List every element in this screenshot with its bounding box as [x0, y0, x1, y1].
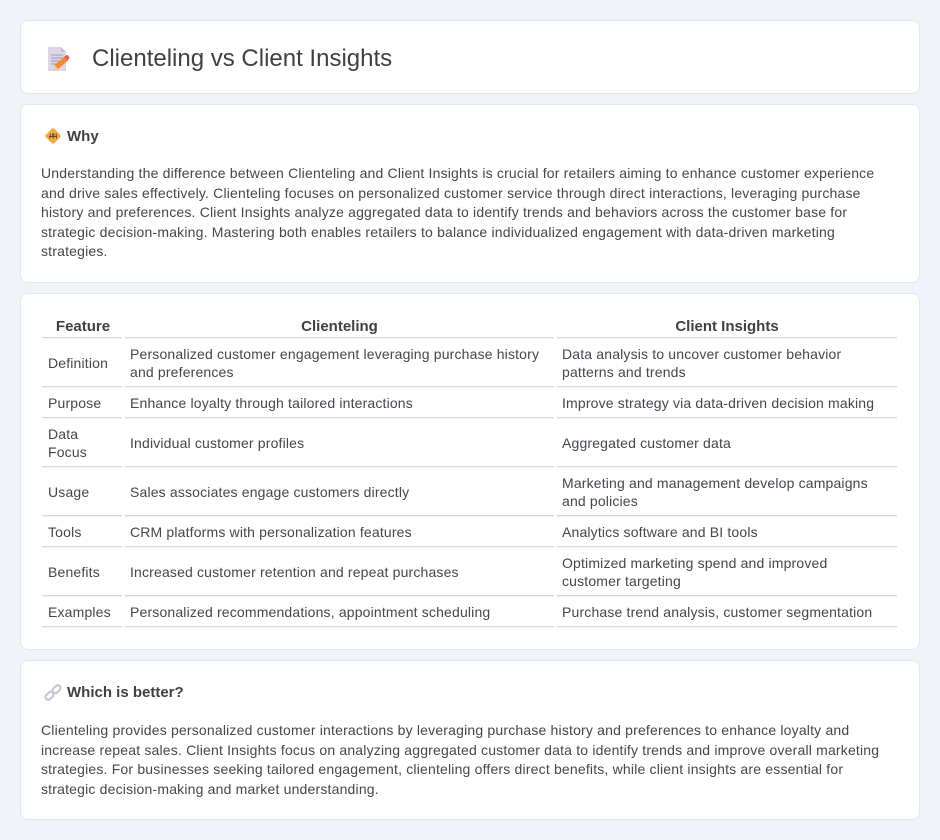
text: why body: Understanding the difference between Clienteling and Client Insights is crucial for retailers aiming to enhance customer experience — [41, 165, 874, 181]
row: tools: Tools — [48, 524, 82, 540]
row: data focus — [42, 426, 897, 468]
title: Clienteling vs Client Insights — [92, 45, 392, 72]
row: usage — [42, 475, 897, 517]
text: which is better body: strategic decision-making and market understanding. — [41, 781, 379, 797]
row: examples: Examples — [48, 604, 111, 620]
icon: document with pencil — [48, 47, 70, 71]
row: usage: Marketing and management develop campaigns — [562, 475, 868, 491]
row: purpose — [42, 395, 897, 419]
text: which is better body: Clienteling provides personalized customer interactions by leveraging purchase history and preferences to enhance loyalty and — [41, 722, 849, 738]
text: why body: strategies. — [41, 243, 108, 259]
row: definition: patterns and trends — [562, 364, 686, 380]
row: benefits: Benefits — [48, 564, 100, 580]
panel: which is better — [20, 660, 920, 820]
row: usage: and policies — [562, 493, 638, 509]
row: benefits: Optimized marketing spend and improved — [562, 555, 827, 571]
row: benefits: Increased customer retention and repeat purchases — [130, 564, 459, 580]
row: purpose: Purpose — [48, 395, 101, 411]
row: data focus: Individual customer profiles — [130, 435, 304, 451]
row: tools: CRM platforms with personalization features — [130, 524, 412, 540]
icon: warning diamond — [45, 128, 61, 144]
heading: which is better: Which is better? — [67, 684, 184, 701]
row: tools: Analytics software and BI tools — [562, 524, 758, 540]
heading: why: Why — [67, 128, 99, 145]
row: definition: Definition — [48, 355, 108, 371]
row: examples — [42, 604, 897, 628]
row: tools — [42, 524, 897, 548]
row: definition — [42, 346, 897, 388]
text: which is better body: strategies. For businesses seeking tailored engagement, clienteling offers direct benefits, while client insights are essential for — [41, 761, 843, 777]
table header row: Client Insights — [675, 318, 779, 335]
row: definition: and preferences — [130, 364, 234, 380]
row: usage: Sales associates engage customers directly — [130, 484, 409, 500]
row: data focus: Focus — [48, 444, 87, 460]
row: usage: Usage — [48, 484, 89, 500]
icon: link — [44, 684, 62, 701]
row: data focus: Aggregated customer data — [562, 435, 731, 451]
panel: comparison table — [20, 293, 920, 650]
text: why body: history and preferences. Client Insights analyze aggregated data to identify trends and behaviors across the customer base for — [41, 204, 847, 220]
text: which is better body: increase repeat sales. Client Insights focus on analyzing aggregated customer data to identify trends and improve overall marketing — [41, 742, 879, 758]
text: why body: strategic decision-making. Mastering both enables retailers to balance individualized engagement with data-driven marketing — [41, 224, 835, 240]
row: definition: Data analysis to uncover customer behavior — [562, 346, 841, 362]
row: data focus: Data — [48, 426, 78, 442]
row: purpose: Improve strategy via data-driven decision making — [562, 395, 874, 411]
table header row: Clienteling — [301, 318, 378, 335]
row: examples: Personalized recommendations, appointment scheduling — [130, 604, 490, 620]
row: benefits: customer targeting — [562, 573, 681, 589]
table header row: Feature — [56, 318, 110, 335]
text: why body: and drive sales effectively. Clienteling focuses on personalized customer service through direct interactions, leveraging purchase — [41, 185, 861, 201]
text: which is better body — [41, 722, 879, 797]
row: benefits — [42, 555, 897, 597]
row: definition: Personalized customer engagement leveraging purchase history — [130, 346, 539, 362]
text: why body — [41, 165, 874, 259]
table header row — [42, 318, 897, 339]
row: examples: Purchase trend analysis, customer segmentation — [562, 604, 872, 620]
panel: why — [20, 104, 920, 283]
panel: header — [20, 20, 920, 94]
row: purpose: Enhance loyalty through tailored interactions — [130, 395, 413, 411]
